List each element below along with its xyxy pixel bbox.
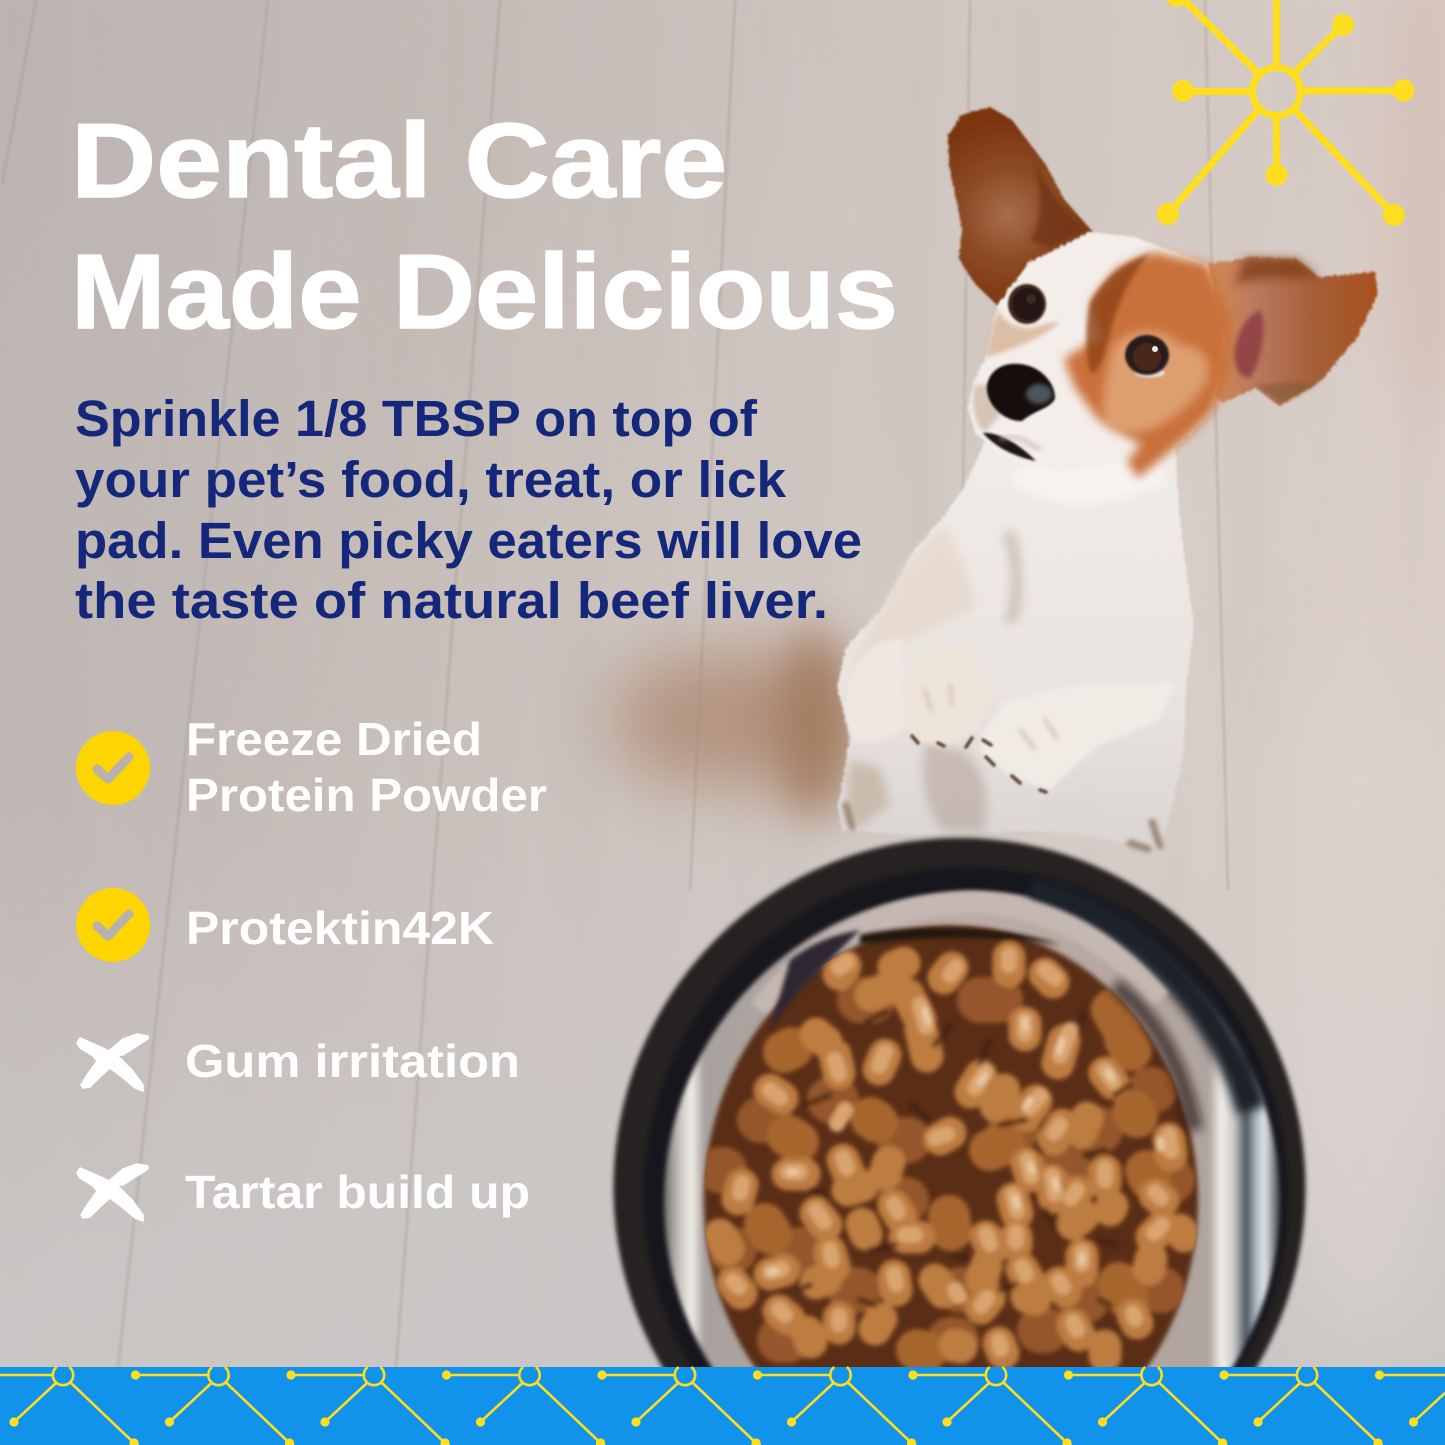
description text <box>75 390 862 629</box>
list item: freeze dried protein powder <box>76 713 547 821</box>
list item: gum irritation <box>77 1034 520 1091</box>
dog right ear <box>1190 257 1378 406</box>
bowl rim <box>610 834 1310 1367</box>
kibble <box>720 955 1184 1356</box>
dog left eye <box>1008 284 1046 324</box>
bowl inner shadow ring <box>642 866 1290 1367</box>
dog fur shading <box>847 460 1165 838</box>
icon: cross <box>77 1164 148 1221</box>
footer band with network pattern <box>0 1367 1445 1445</box>
list item: tartar build up <box>77 1164 530 1221</box>
description text: your pet’s food, treat, or lick <box>75 451 787 508</box>
list item: freeze dried protein powder: Freeze Dried <box>186 713 482 765</box>
description text: Sprinkle 1/8 TBSP on top of <box>75 390 758 447</box>
dog head <box>968 232 1225 478</box>
title <box>71 102 898 351</box>
dog right eye <box>1125 335 1169 378</box>
photo: dog <box>614 107 1378 1440</box>
list item: gum irritation: Gum irritation <box>185 1035 520 1087</box>
list item: protektin42k: Protektin42K <box>186 902 494 954</box>
icon: check <box>76 888 150 962</box>
food bowl <box>610 834 1310 1367</box>
bowl metal ring <box>661 888 1282 1367</box>
dog paws <box>846 647 1175 849</box>
bowl top right dark reflection <box>1030 893 1252 1110</box>
graphic: yellow starburst network <box>1157 0 1414 226</box>
dog nose <box>987 364 1055 421</box>
dog left ear <box>948 107 1092 306</box>
bowl top light rim <box>760 902 1160 1010</box>
dog orange face patch <box>1064 252 1232 478</box>
dog muzzle tan markings <box>985 310 1060 358</box>
dog left arm <box>847 639 915 741</box>
list item: tartar build up: Tartar build up <box>185 1166 530 1218</box>
description text: pad. Even picky eaters will love <box>75 512 862 569</box>
list item: protektin42k <box>76 888 494 962</box>
list item: freeze dried protein powder: Protein Powder <box>186 769 547 821</box>
icon: cross <box>77 1034 148 1091</box>
title: Dental Care <box>71 102 727 220</box>
dog body <box>837 440 1194 851</box>
bowl right inner shadow <box>1115 985 1195 1130</box>
icon: check <box>76 731 150 805</box>
description text: the taste of natural beef liver. <box>75 572 828 629</box>
title: Made Delicious <box>71 233 898 351</box>
dog mouth <box>983 433 1036 461</box>
bowl inside <box>700 922 1202 1367</box>
